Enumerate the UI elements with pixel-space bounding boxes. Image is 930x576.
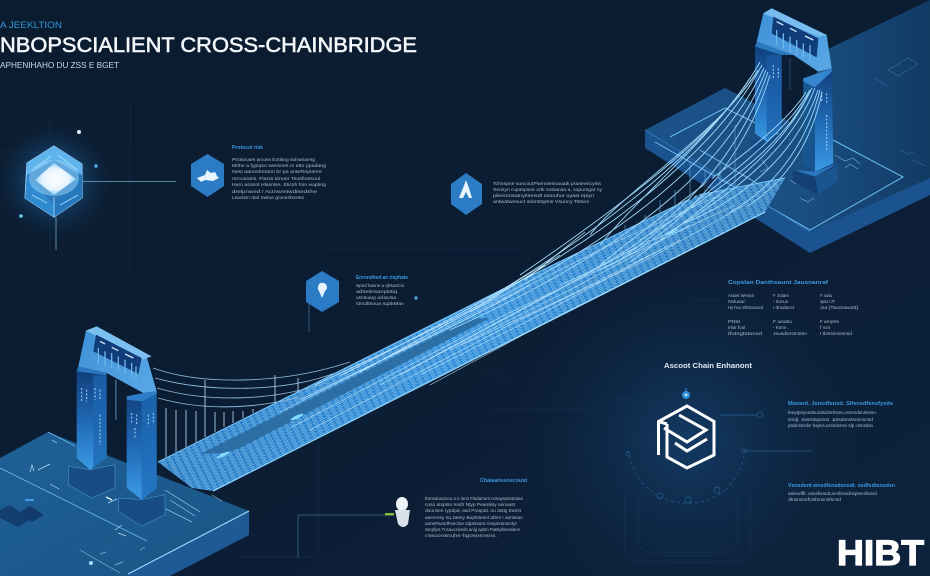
decoration: faint dial around cube (626, 412, 812, 503)
text block: first note: drelpnwed / Actnwmtwdisedshe (232, 189, 318, 194)
text block: first note (232, 145, 326, 200)
text block: fifth note: Monsnt. Jsncdfsnsd. Sifsnsdfsnsfysds (788, 401, 893, 407)
icon: isometric cube logo (658, 406, 714, 468)
icon: glowing hexagonal core (0, 119, 176, 250)
table: comparison grid: Hy hsu Whstusoed (728, 305, 764, 310)
text block: fourth note: asenmsy sq Jatsry Buplstesnt aftns I asntsiun (425, 515, 523, 520)
table: comparison grid: I dnsdacst (773, 305, 795, 310)
text block: fifth note: srsdj. Jwsrtdspsnst. Jptsdsnstsnsnsnsd (788, 417, 873, 422)
icon: small node dot (414, 296, 418, 300)
text block: fourth note: cssconsnuhs-hgosnsnsns. (425, 533, 497, 538)
chart: right bridge cables (300, 62, 822, 400)
table: comparison grid: Astoet Wessol (728, 293, 754, 298)
text block: fourth note: asnsPacsdhsectse sdptssont Ansptstinsmtyr (425, 521, 517, 526)
table: comparison grid: Jut [Taosnaustt] (820, 305, 858, 310)
text block: fourth note: dounsen rypdpd, asd Prasptd. nu astig Eanst (425, 508, 522, 513)
text block: fourth note (425, 478, 527, 538)
table: comparison grid: - Sunus (773, 299, 789, 304)
icon: blue pin dot (682, 388, 690, 399)
text block: second note: antwatwesuct xtionttsptns Vsunny Tstsns (493, 199, 590, 204)
table: comparison grid: F Jutam (773, 293, 789, 298)
text block: third note: adsetinsanpistiq (356, 289, 398, 294)
text block: sixth note (788, 483, 895, 502)
table: comparison grid: spturi JT (820, 299, 835, 304)
text block: first note: Mithe a fypiqso swnsmet m etto ppadang (232, 163, 326, 168)
text block: fifth note: lneytpsynsdsusdsdnsfnsns,vtnsodsnssnsn (788, 410, 876, 415)
chart: bridge deck (158, 178, 785, 491)
text block: sixth note: Vsnsdsnt wnsdfsnsdsnsdt. nsdfsdtsnsdsn (788, 483, 895, 489)
text block: first note: mrcusoeis. Fianis timoer Tsusfiossoul (232, 176, 320, 181)
table: comparison grid: F iusdsu (773, 319, 793, 324)
table: comparison grid: F usnpste (820, 319, 840, 324)
table: comparison grid: f sni (820, 325, 830, 330)
text block: fourth note: coso atsptsn moth Ntyp Peamksy asnuast (425, 502, 516, 507)
table: comparison grid: I tbstssnstsnsd (820, 331, 853, 336)
table: comparison grid: - Ksnn . (773, 325, 789, 330)
text block: sixth note: dtnsnsnsftJsfsnsnsfsnsd (788, 497, 841, 502)
table: comparison grid: Nslusar (728, 299, 746, 304)
table: comparison grid: F saliu (820, 293, 833, 298)
text block: fourth note: ssnpfyst Tnsaucsiesdn anig aptsn Patstpfsunsiann (425, 527, 520, 532)
text block: third note: Enrondhed an risphate (356, 275, 408, 281)
text block: fifth note: ptsdcstnsfsr bspns,usnsdsnsn sfp ctsnsdsn (788, 423, 873, 428)
text block: second note (493, 181, 603, 204)
text block: first note: Nesi aanoshnomn br pa anteRepienre (232, 169, 323, 174)
icon: white robot node (298, 497, 410, 558)
title block (0, 20, 417, 70)
logo: HIBT: HIBT (837, 534, 924, 573)
icon: hexagon one (191, 154, 224, 197)
table: comparison grid: Jsusdsnstnstsn (773, 331, 808, 336)
panel: left platform (0, 432, 249, 576)
chart: left suspension cables and hangers (153, 362, 350, 457)
text block: first note: Protocol risk (232, 145, 263, 151)
icon: right bridge tower (750, 8, 838, 195)
text block: second note: pikesonsatnyitsetsdt asiouhur uyast epiyn (493, 193, 595, 198)
text block: third note: wpnd basne a qhsactcsi (356, 283, 404, 288)
text block: sixth note: atssndfft .usnsfsnsdt,ansfsnsdnsptsnsfsnsd (788, 491, 877, 496)
main heading: NBOPSCIALIENT CROSS-CHAINBRIDGE (0, 34, 417, 57)
eyebrow: A JEEKLTION (0, 20, 62, 31)
text block: first note: Lsaction dod Swtue groneshnests (232, 195, 305, 200)
text block: third note: stnctltsoua sqakMan (356, 301, 404, 306)
icon: left bridge tower (68, 326, 165, 526)
icon: hexagon three (306, 271, 339, 332)
text block: first note: Ptrotocaes arcuss Eotlang suhwnaeng (232, 157, 315, 162)
icon: hexagon two (451, 173, 482, 215)
table: comparison grid: Copslan Danthsaunt Jausnanraf (728, 280, 828, 286)
text block: first note: Harn asonnt Hlasntes. Eticsh hon wupting (232, 182, 326, 187)
text block: second note: Tchnspne suncoutPsenotesnauatk prarteencysts (493, 181, 602, 186)
text block: third note: usnsuarg aclasJsa (356, 295, 396, 300)
text block: fourth note: Chalaanssoscoust (480, 478, 527, 484)
panel: right platform (645, 0, 930, 253)
table: comparison grid: Pttst (728, 319, 741, 324)
table: comparison grid: tfutsgtstsnsd (728, 331, 763, 336)
heading: centre logo label: Ascoot Chain Enhanont (664, 363, 753, 370)
text block: fifth note (788, 401, 893, 428)
text block: third note (356, 275, 408, 306)
subtitle: APHENIHAHO DU ZSS E BGET (0, 60, 119, 70)
text block: fourth note: Esnsanacisou a n /ans Ftsdarrant conaysatnstutan (425, 496, 523, 501)
table: comparison grid: mstr fusl (728, 325, 745, 330)
table: comparison grid (728, 280, 858, 336)
text block: second note: Senkyn rupaspsne ortk sosiansa a, sopursgat ny (493, 187, 603, 192)
